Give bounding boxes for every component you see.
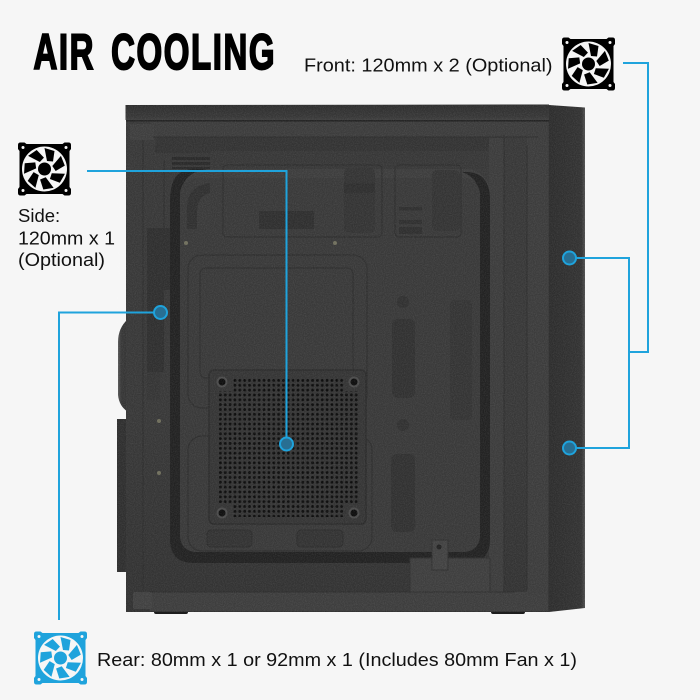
PC case illustration (117, 104, 585, 614)
side fan label (18, 205, 115, 270)
frame bands (130, 122, 548, 611)
surface grain (117, 105, 585, 612)
curved top-left recess (187, 183, 210, 229)
front panel side (549, 105, 585, 612)
case screws (157, 241, 337, 475)
rear expansion bracket protrusion (117, 419, 127, 572)
connector: side fan to mesh (87, 171, 293, 450)
side fan label: (Optional) (18, 249, 105, 270)
icon: rear fan (34, 632, 87, 684)
standoff cutouts (391, 296, 472, 532)
perforated holes (218, 391, 358, 503)
rear side bump (118, 319, 128, 412)
mounting tabs (207, 530, 343, 547)
icon: side fan (18, 142, 71, 196)
connector: front fan to front panel points (563, 63, 648, 454)
upper tray recess (188, 165, 461, 551)
front fan label: Front: 120mm x 2 (Optional) (304, 54, 552, 76)
ventilation mesh fan mount (209, 370, 366, 524)
title: AIR COOLING (34, 24, 276, 80)
frame details (143, 135, 538, 592)
top edge (126, 104, 549, 120)
recess slots (259, 183, 422, 234)
case side body (126, 121, 549, 612)
rear fan label: Rear: 80mm x 1 or 92mm x 1 (Includes 80mm Fan x 1) (97, 649, 577, 670)
case feet (154, 610, 525, 614)
side fan label: 120mm x 1 (18, 228, 115, 248)
lower right bracket (410, 558, 490, 592)
connector: rear fan to rear of case (59, 306, 167, 620)
side fan label: Side: (18, 205, 60, 226)
icon: front fan (562, 38, 615, 90)
recess panels (344, 168, 460, 233)
left column shade (147, 228, 170, 372)
mount screws (218, 378, 358, 518)
motherboard tray channel (170, 169, 490, 563)
